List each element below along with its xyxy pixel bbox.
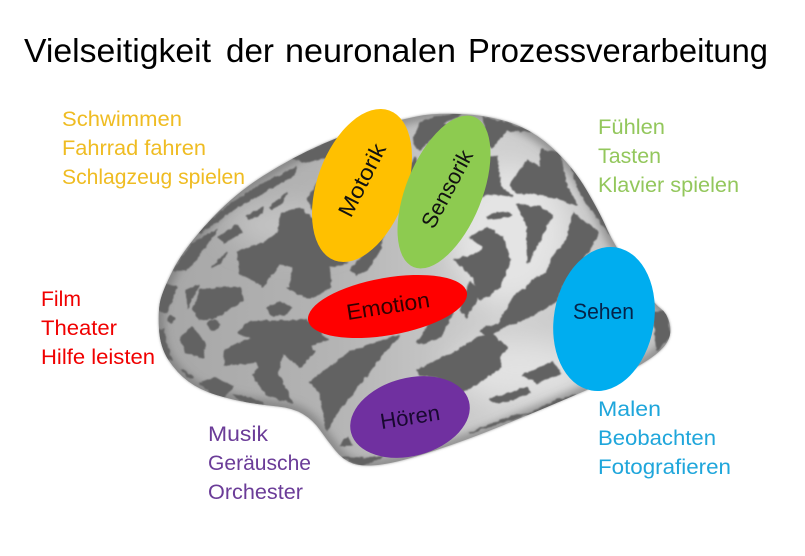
text block: Emotion examples — [41, 287, 155, 369]
title: der — [226, 32, 274, 69]
text block: Motorik examples: Schlagzeug spielen — [62, 165, 245, 189]
text block: Sensorik examples: Tasten — [598, 144, 661, 168]
text block: Motorik examples: Fahrrad fahren — [62, 136, 206, 160]
brain illustration — [150, 105, 680, 475]
region: Sensorik — [378, 103, 510, 281]
text block: Sehen examples: Malen — [598, 397, 661, 421]
text block: Sensorik examples: Fühlen — [598, 115, 665, 139]
text block: Hören examples — [208, 422, 311, 504]
text block: Hören examples: Orchester — [208, 480, 303, 504]
title: Vielseitigkeit — [24, 32, 211, 69]
region: Emotion: Emotion — [345, 287, 431, 325]
region: Sensorik: Sensorik — [416, 145, 478, 232]
text block: Emotion examples: Theater — [41, 316, 117, 340]
text block: Emotion examples: Hilfe leisten — [41, 345, 155, 369]
text block: Hören examples: Musik — [208, 422, 268, 446]
region: Sehen: Sehen — [573, 299, 634, 324]
text block: Sehen examples: Beobachten — [598, 426, 716, 450]
text block: Sensorik examples — [598, 115, 739, 197]
region: Emotion — [303, 264, 472, 349]
region: Motorik — [293, 95, 431, 276]
text block: Sensorik examples: Klavier spielen — [598, 173, 739, 197]
text block: Hören examples: Geräusche — [208, 451, 311, 475]
text block: Emotion examples: Film — [41, 287, 81, 311]
region: Sehen — [542, 239, 666, 399]
title: Prozessverarbeitung — [468, 32, 768, 69]
title: neuronalen — [285, 32, 456, 69]
title — [24, 32, 768, 69]
region: Hören: Hören — [378, 400, 442, 434]
text block: Motorik examples: Schwimmen — [62, 107, 182, 131]
region: Hören — [341, 364, 479, 470]
region: Motorik: Motorik — [333, 138, 392, 221]
text block: Motorik examples — [62, 107, 245, 189]
text block: Sehen examples: Fotografieren — [598, 455, 731, 479]
text block: Sehen examples — [598, 397, 731, 479]
